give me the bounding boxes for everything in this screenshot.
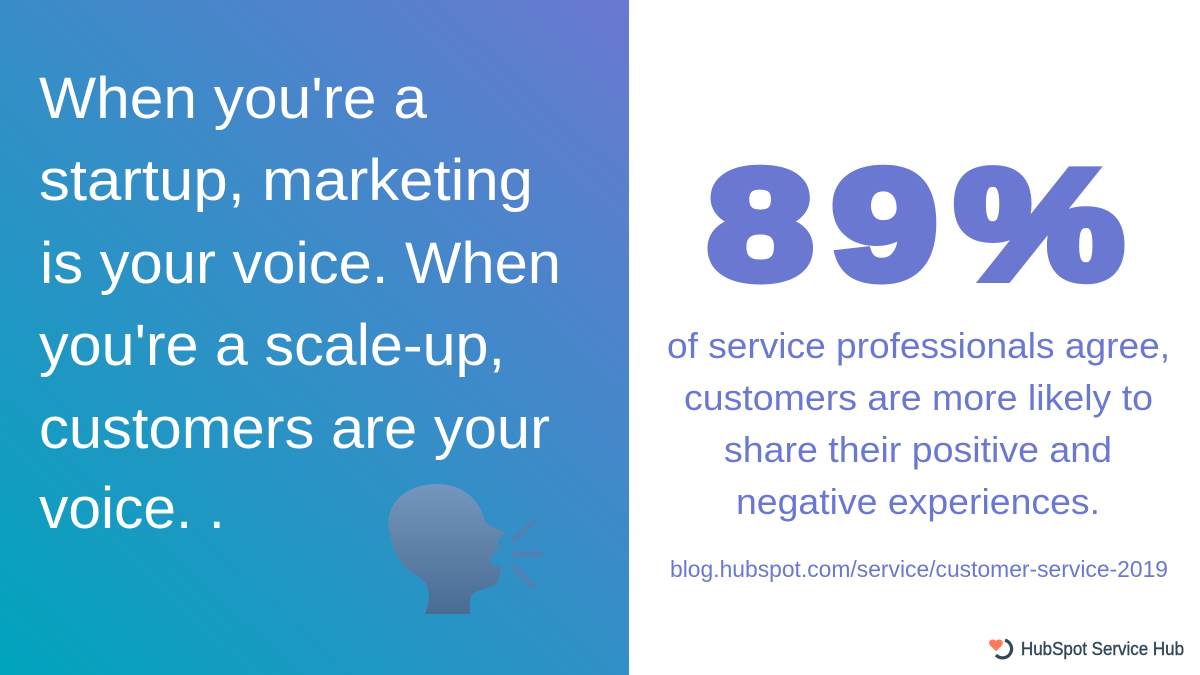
quote text: is your voice. When (40, 231, 561, 296)
big statistic 89%: 89% (708, 137, 1123, 311)
statistic description: of service professionals agree, (667, 325, 1170, 366)
statistic description (667, 325, 1170, 522)
quote text: When you're a (39, 66, 428, 131)
quote text: startup, marketing (39, 148, 533, 213)
source link: blog.hubspot.com/service/customer-service-2019 (670, 556, 1168, 582)
statistic description: negative experiences. (736, 481, 1100, 522)
statistic description: share their positive and (724, 429, 1112, 470)
quote text (39, 66, 561, 541)
panel: white statistic background (629, 0, 1200, 675)
quote text: voice. . (39, 476, 225, 541)
panel: gradient quote background (0, 0, 629, 675)
logo: HubSpot Service Hub: HubSpot Service Hub (1021, 639, 1184, 659)
icon: speaking head (389, 484, 540, 614)
quote text: you're a scale-up, (39, 313, 505, 378)
statistic description: customers are more likely to (684, 377, 1153, 418)
quote text: customers are your (39, 396, 550, 461)
